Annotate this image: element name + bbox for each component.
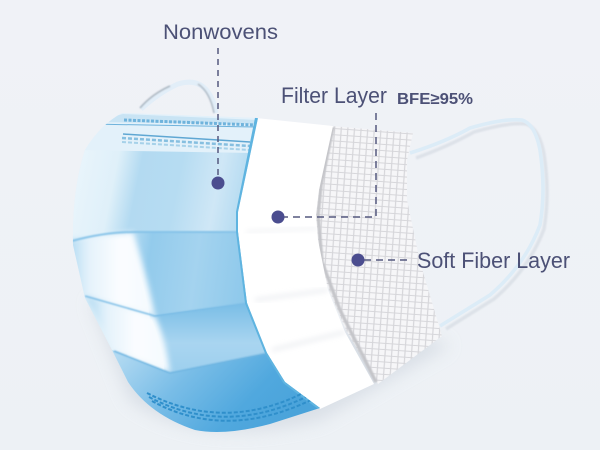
layer: filter (white) — [238, 118, 374, 409]
fold lines — [72, 232, 238, 241]
layer: soft fiber (textured grid) — [316, 126, 442, 384]
pleat 1 left — [66, 232, 155, 316]
bottom stitching — [147, 392, 305, 413]
callout: filter layer: BFE≥95% — [397, 91, 473, 108]
mask drop shadow — [90, 300, 450, 431]
top binding band — [122, 145, 249, 153]
pleat 2 left — [85, 296, 170, 373]
callout: nonwovens: Nonwovens — [163, 20, 278, 44]
right edge seam — [238, 118, 320, 408]
layer: nonwovens (blue outer) — [72, 113, 320, 432]
callout: soft fiber layer — [352, 248, 570, 273]
ear loop: left — [140, 82, 216, 113]
callout: nonwovens — [163, 20, 278, 190]
pleat 2 right — [150, 303, 270, 376]
callout: filter layer — [272, 83, 473, 224]
ear loop: right — [410, 120, 547, 329]
callout: soft fiber layer: Soft Fiber Layer — [417, 248, 570, 273]
pleat 3 bottom — [112, 350, 325, 438]
upper panel — [74, 145, 252, 236]
callout: filter layer: Filter Layer — [281, 83, 387, 108]
infographic: mask layers diagram — [72, 24, 570, 434]
pleat 1 right — [125, 232, 250, 320]
